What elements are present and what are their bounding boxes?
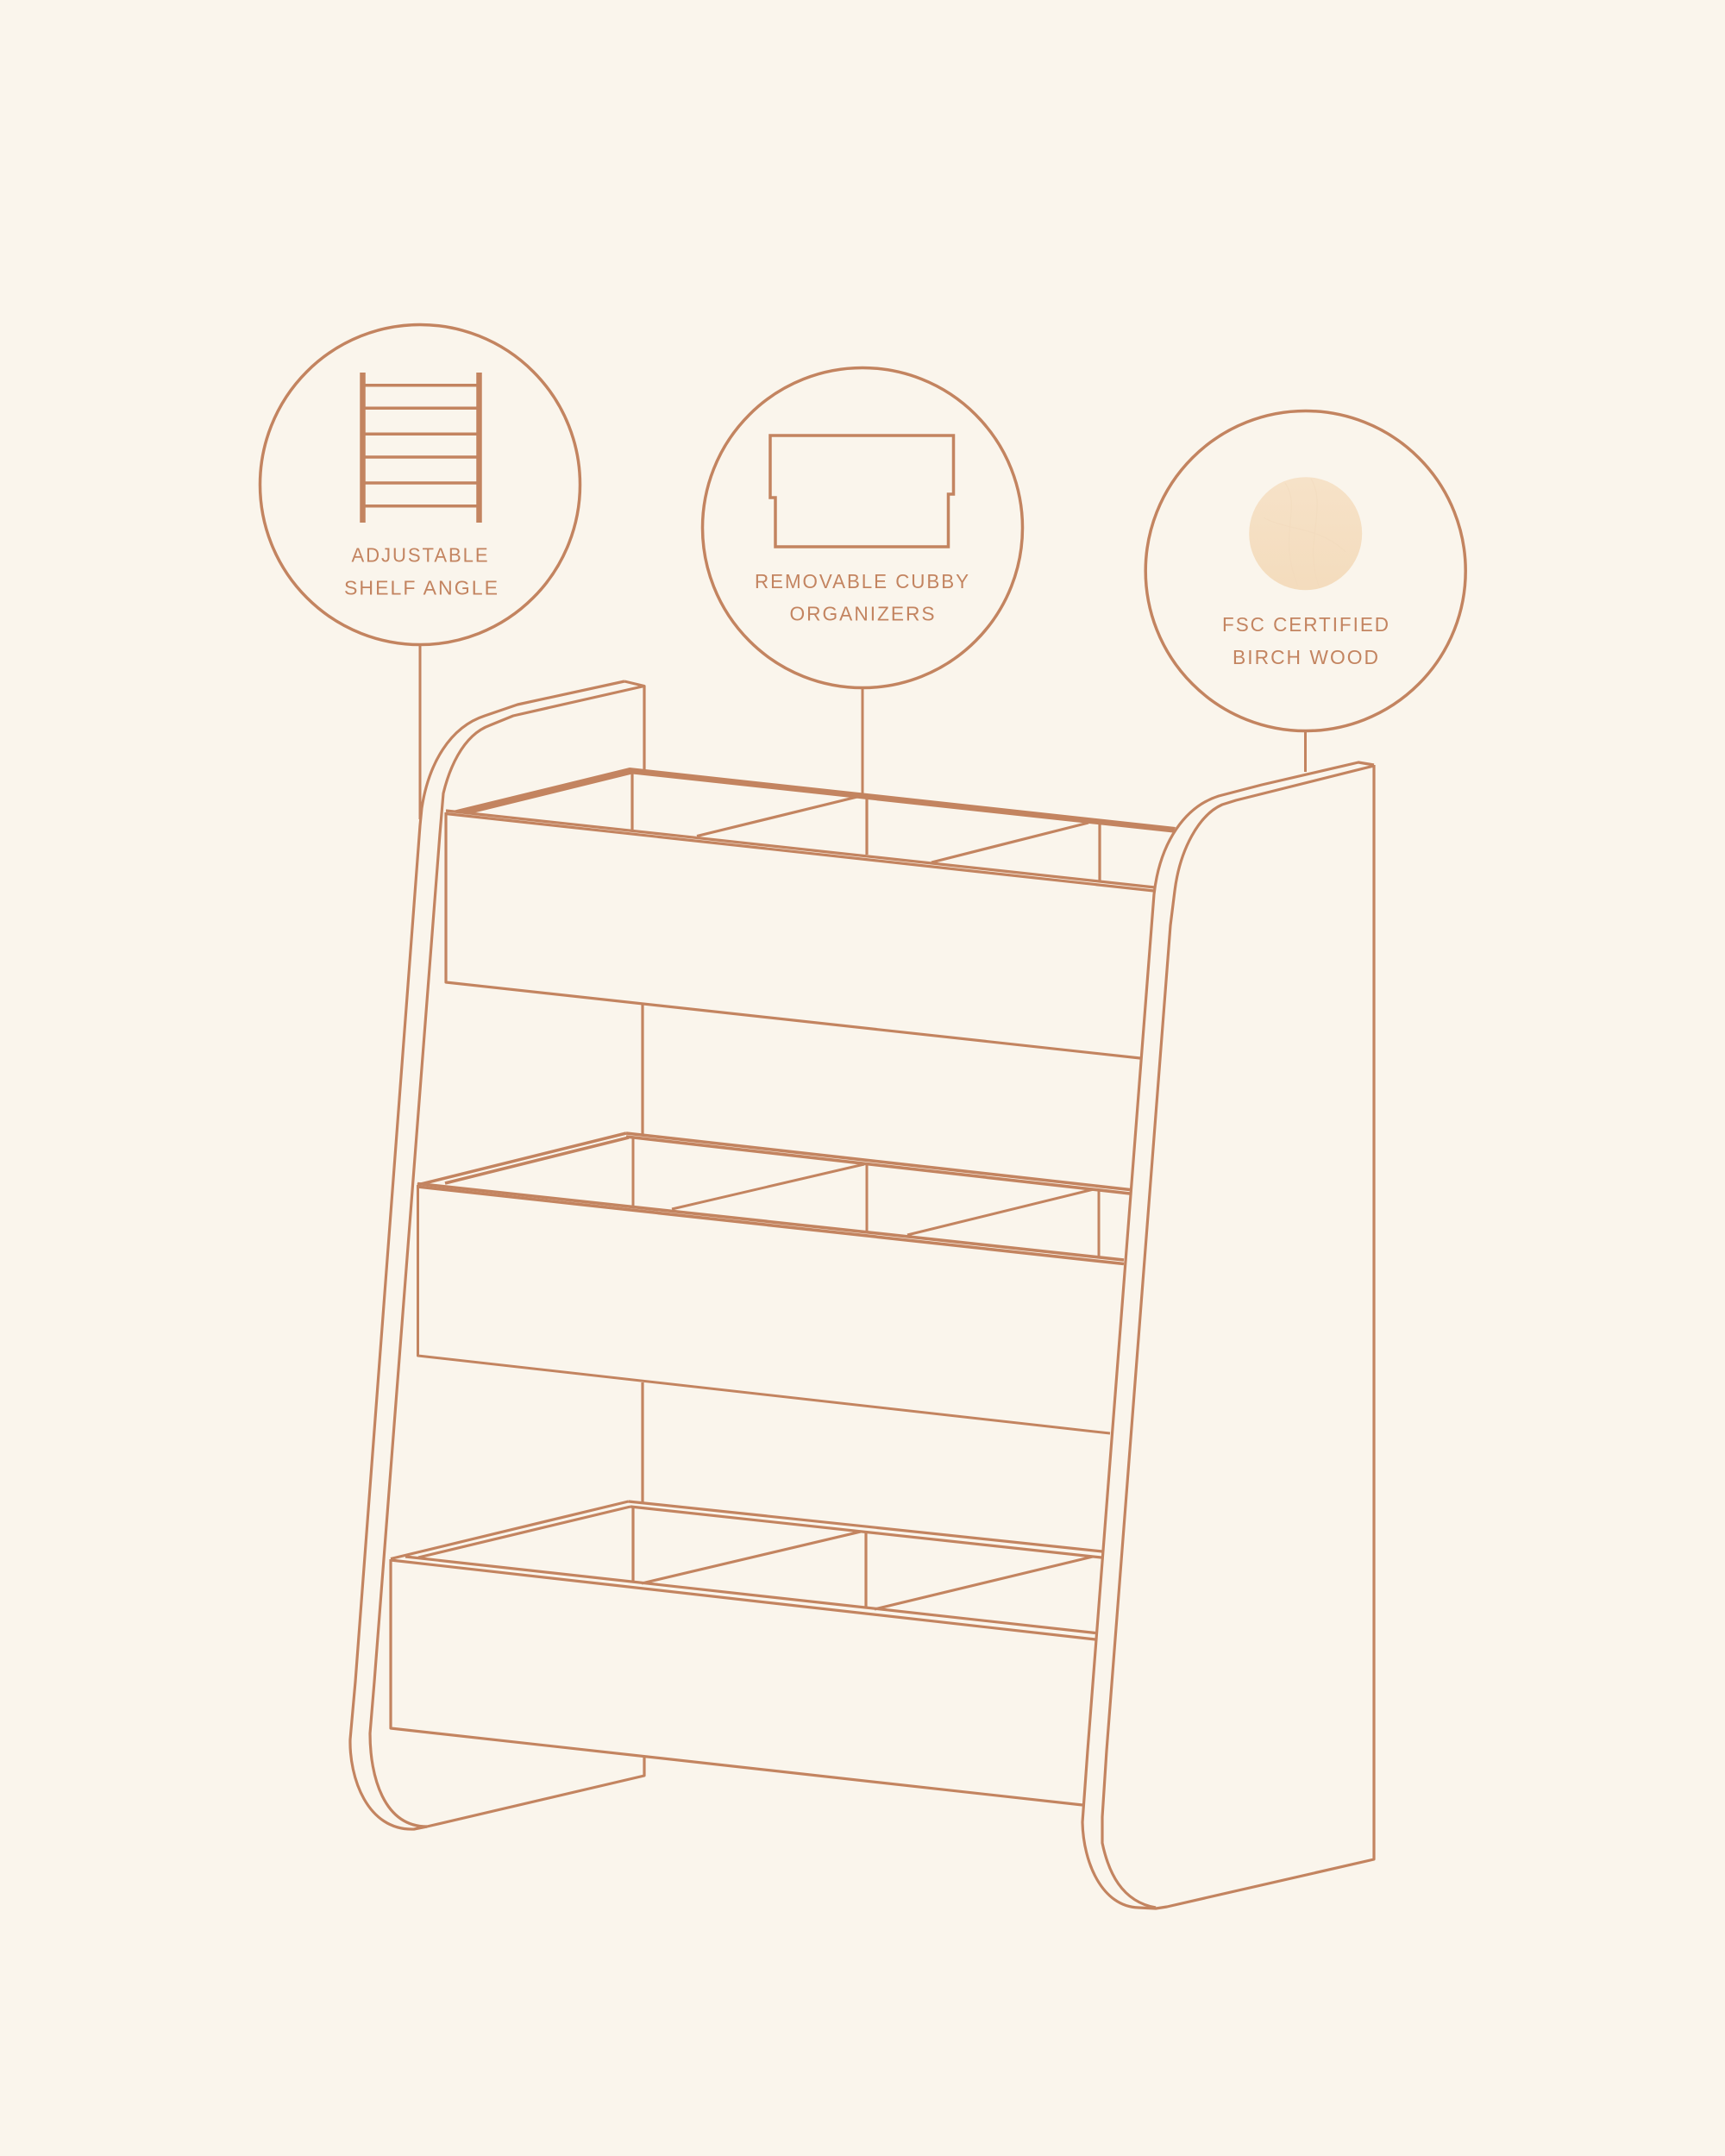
- top shelf front panel: [446, 811, 1155, 1058]
- callout: adjustable shelf angle: [260, 324, 580, 819]
- connector line: [419, 645, 421, 819]
- label: FSC certified birch wood: FSC CERTIFIED: [1222, 613, 1390, 636]
- middle shelf: [417, 1133, 1130, 1433]
- callout: FSC certified birch wood: [1145, 411, 1465, 772]
- illustration: bookshelf: [350, 681, 1374, 1908]
- top shelf: [446, 768, 1176, 1058]
- callout: removable cubby organizers: [702, 367, 1023, 795]
- label: removable cubby organizers: [755, 570, 970, 624]
- top shelf rim: [446, 768, 1176, 833]
- middle shelf rim: [417, 1133, 1130, 1194]
- icon: cubby organizer: [770, 436, 954, 547]
- label: adjustable shelf angle: [344, 543, 499, 599]
- label: removable cubby organizers: ORGANIZERS: [790, 602, 937, 624]
- middle shelf front panel: [417, 1183, 1124, 1433]
- label: removable cubby organizers: REMOVABLE CUBBY: [755, 570, 970, 592]
- label: adjustable shelf angle: ADJUSTABLE: [352, 543, 490, 566]
- left side panel: [350, 681, 644, 1829]
- label: adjustable shelf angle: SHELF ANGLE: [344, 576, 499, 599]
- bottom shelf: [391, 1501, 1102, 1805]
- right side panel: [1082, 762, 1374, 1908]
- callout circle: [260, 324, 580, 645]
- bottom shelf cubby dividers: [633, 1507, 1093, 1609]
- callout circle: [702, 367, 1023, 688]
- label: FSC certified birch wood: BIRCH WOOD: [1233, 646, 1380, 668]
- label: FSC certified birch wood: [1222, 613, 1390, 668]
- bottom shelf front panel: [391, 1557, 1095, 1805]
- middle shelf cubby dividers: [633, 1138, 1099, 1257]
- icon: birch wood swatch: [1249, 477, 1362, 590]
- icon: ladder: [362, 373, 480, 523]
- connector line: [1304, 731, 1307, 772]
- bottom shelf rim: [391, 1501, 1102, 1559]
- top shelf cubby dividers: [632, 773, 1100, 881]
- connector line: [861, 688, 864, 795]
- callout circle: [1145, 411, 1465, 731]
- back post segments: [641, 1005, 644, 1503]
